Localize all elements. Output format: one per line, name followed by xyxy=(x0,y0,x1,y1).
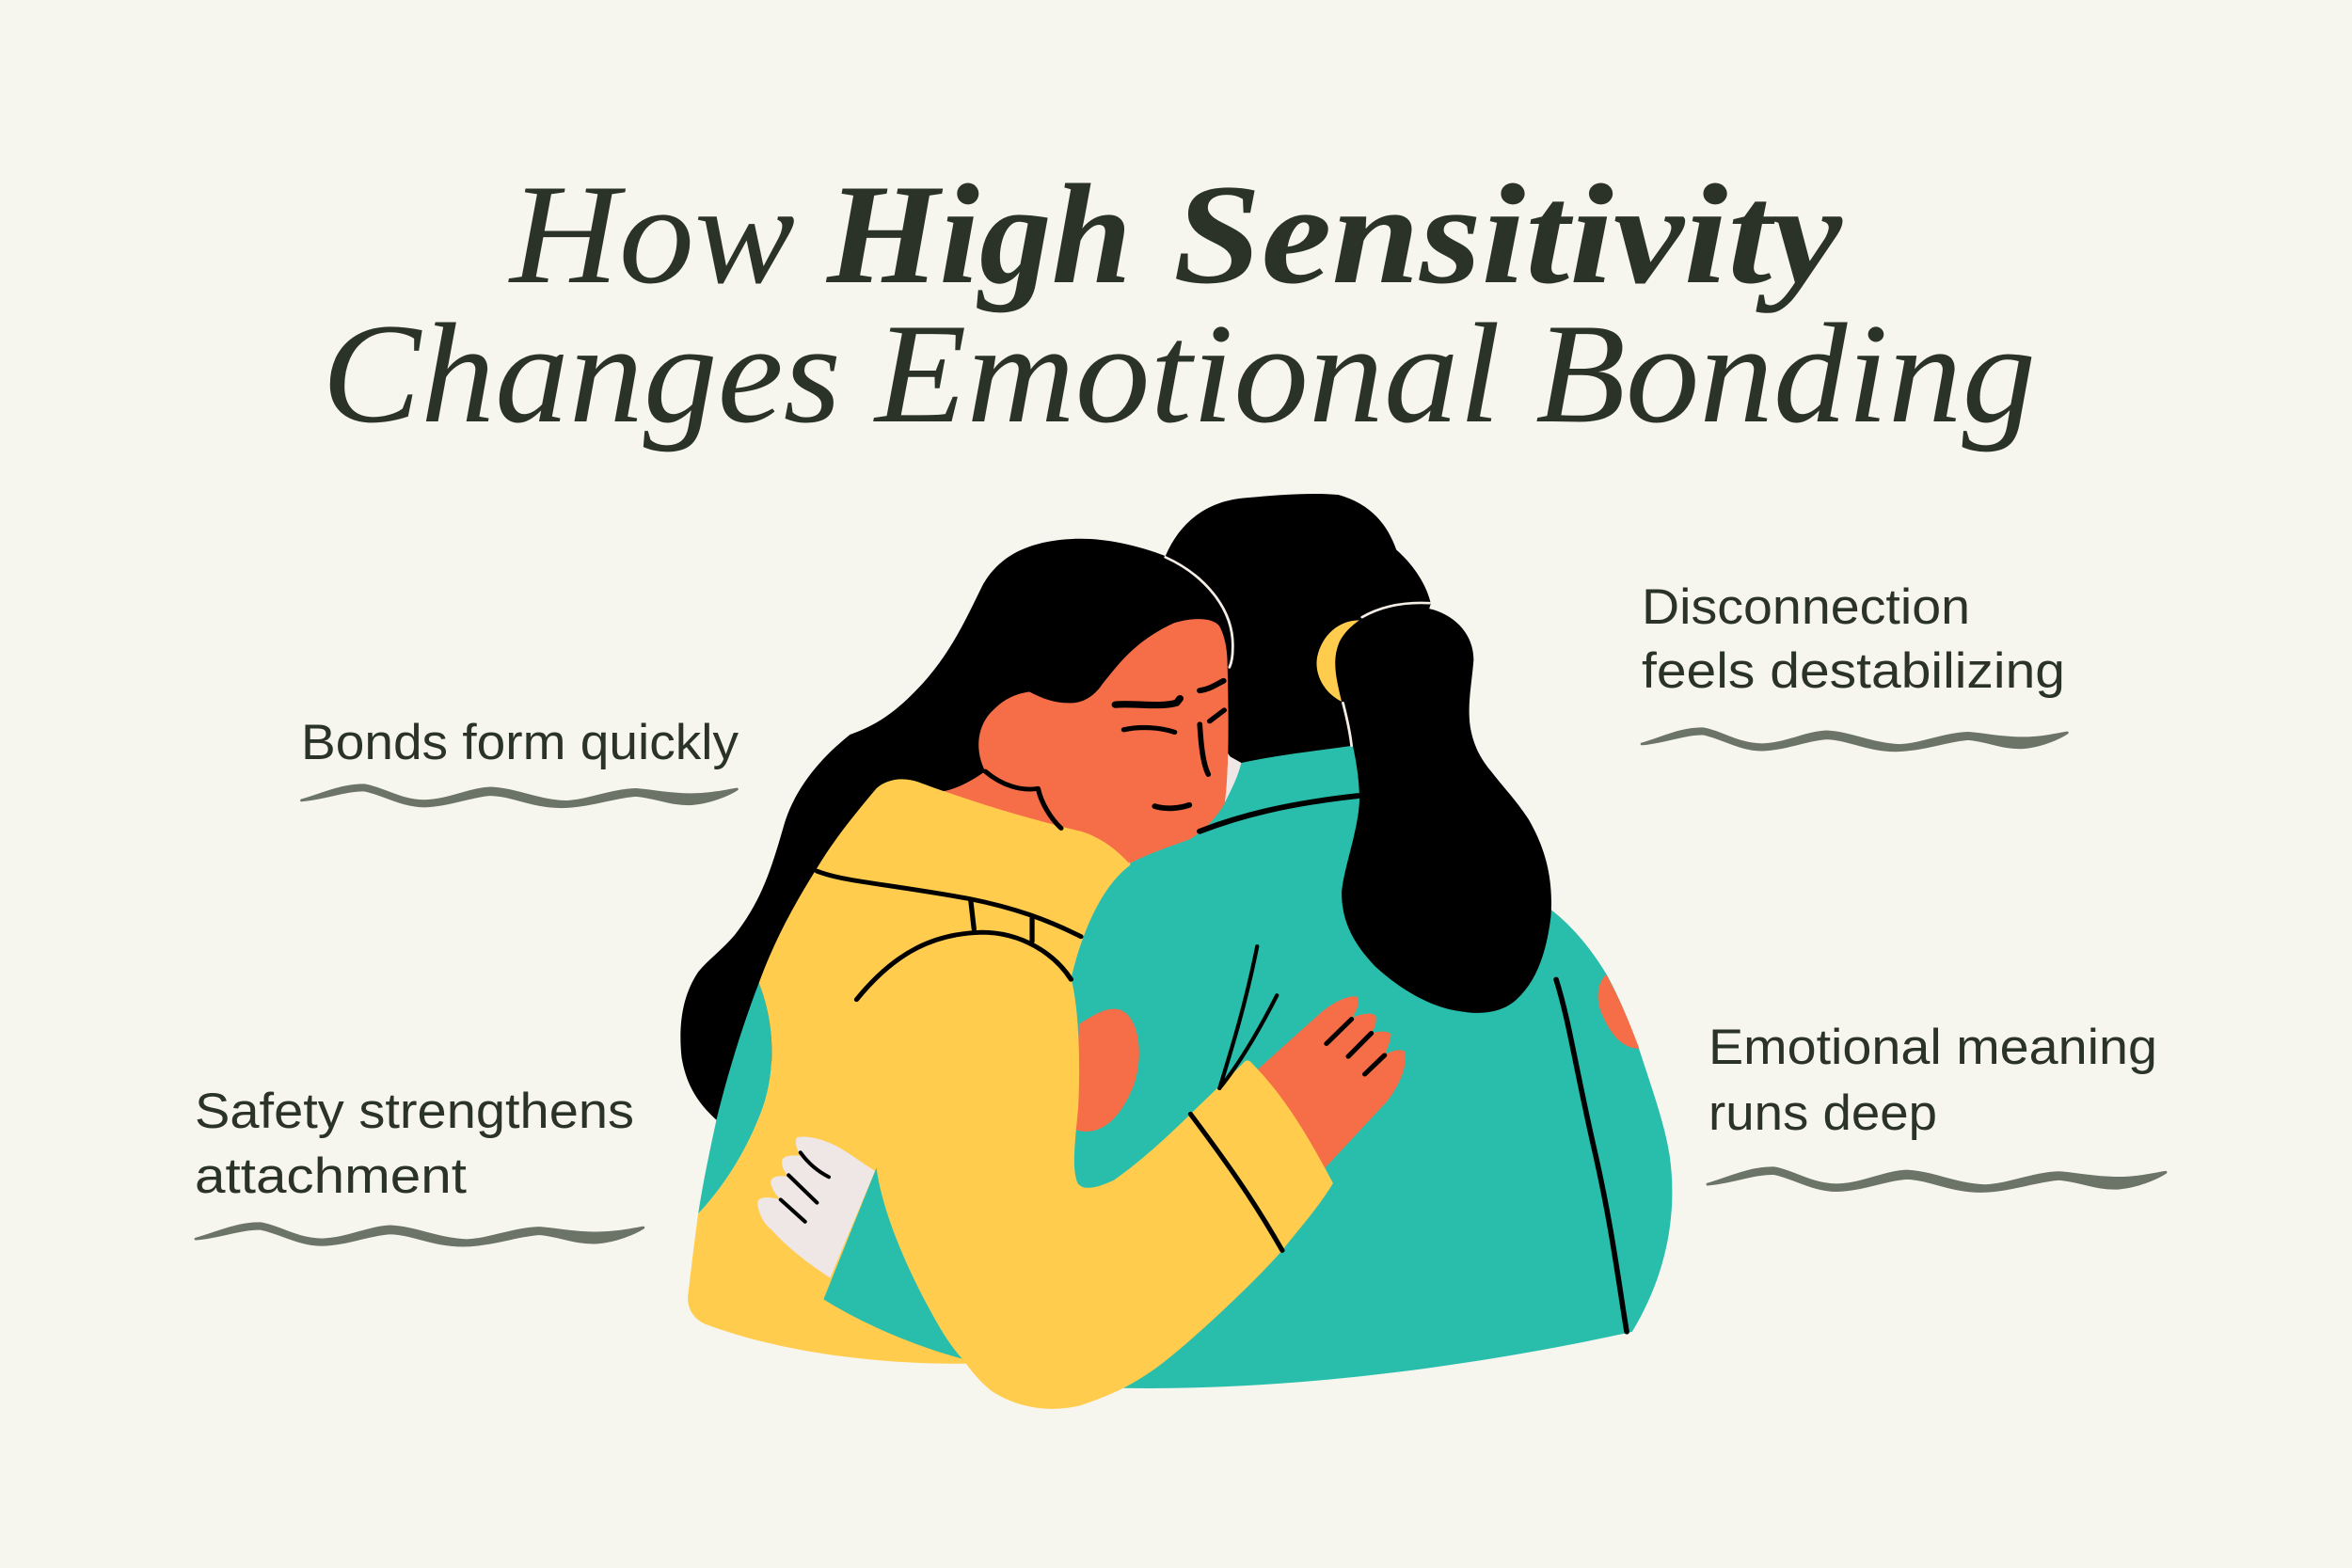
title: Sensitivity xyxy=(1173,155,1843,313)
title: Emotional xyxy=(873,294,1501,452)
title: Bonding xyxy=(1535,294,2036,452)
title xyxy=(322,155,2036,452)
back woman's hair top xyxy=(1160,494,1431,770)
callout: disconnection feels destabilizing: feels destabilizing xyxy=(1642,643,2065,699)
back woman's ponytail xyxy=(1335,607,1551,1013)
title: Changes xyxy=(322,294,841,452)
face and neck xyxy=(943,619,1229,863)
outline details xyxy=(781,681,1627,1332)
callout: safety strengthens attachment: attachment xyxy=(195,1148,467,1204)
title: How xyxy=(508,155,795,313)
teal panel near hand xyxy=(823,1168,962,1359)
far arm xyxy=(1075,1009,1139,1132)
earring xyxy=(1316,620,1359,702)
title: High xyxy=(825,155,1132,313)
back woman's teal jacket xyxy=(1055,746,1672,1388)
white collar sliver xyxy=(1225,755,1241,802)
front woman's yellow sweater xyxy=(688,779,1333,1409)
illustration: two women embracing xyxy=(680,494,1672,1409)
callout: safety strengthens attachment xyxy=(195,1084,644,1245)
orange elbow xyxy=(1598,974,1639,1049)
callout: emotional meaning runs deep: runs deep xyxy=(1708,1085,1937,1141)
callout: bonds form quickly xyxy=(301,715,739,807)
callout: safety strengthens attachment: Safety strengthens xyxy=(195,1084,634,1139)
callout: disconnection feels destabilizing: Disconnection xyxy=(1642,579,1970,635)
white hand xyxy=(757,1136,875,1278)
orange hand on back xyxy=(1256,996,1406,1168)
callout: emotional meaning runs deep: Emotional meaning xyxy=(1708,1020,2157,1075)
callout: emotional meaning runs deep xyxy=(1708,1020,2166,1191)
teal jacket behind front woman xyxy=(698,983,771,1213)
white highlights xyxy=(1166,557,1429,746)
callout: disconnection feels destabilizing xyxy=(1642,579,2067,751)
callout: bonds form quickly: Bonds form quickly xyxy=(301,715,739,770)
front woman's long hair xyxy=(680,539,1232,1120)
